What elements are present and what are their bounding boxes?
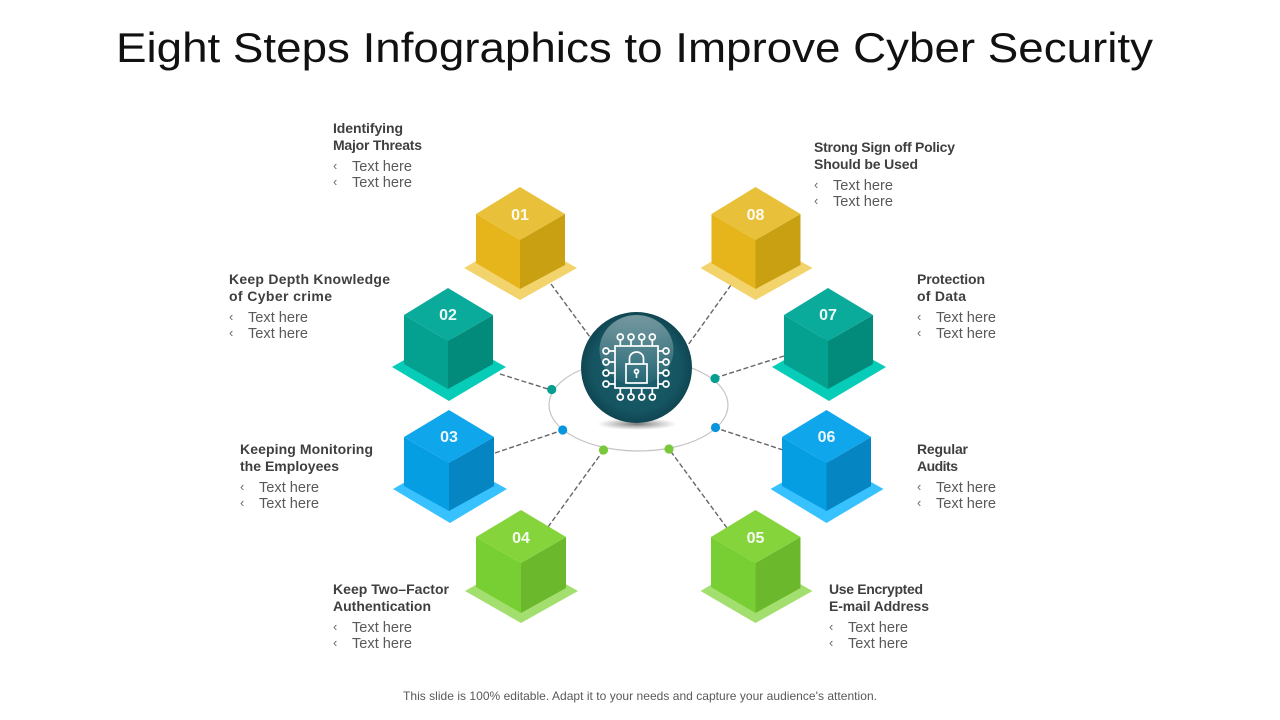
text block: step 01: ‹ xyxy=(333,174,337,189)
text block: step 07: Text here xyxy=(936,310,996,326)
text block: step 08 xyxy=(814,139,955,210)
center sphere with chip lock icon xyxy=(581,312,692,430)
text block: step 02: Text here xyxy=(248,310,308,326)
text block: step 07 xyxy=(917,271,996,342)
title: Eight Steps Infographics to Improve Cyber Security xyxy=(116,24,1153,71)
text block: step 04: ‹ xyxy=(333,619,337,634)
text block: step 05: Text here xyxy=(848,620,908,636)
text block: step 01: Major Threats xyxy=(333,137,422,153)
text block: step 03: the Employees xyxy=(240,458,339,474)
cube 05 xyxy=(700,510,812,623)
text block: step 06: ‹ xyxy=(917,495,921,510)
text block: step 03: ‹ xyxy=(240,479,244,494)
cube 04 xyxy=(465,510,578,623)
connector lines xyxy=(495,284,784,528)
text block: step 08: ‹ xyxy=(814,193,818,208)
cube 03 xyxy=(393,410,507,523)
cube 04: 04 xyxy=(512,530,530,547)
cube 02 xyxy=(392,288,506,401)
cube 05: 05 xyxy=(747,530,764,547)
text block: step 03: Text here xyxy=(259,496,319,512)
footer note: This slide is 100% editable. Adapt it to your needs and capture your audience's attention. xyxy=(403,689,877,703)
text block: step 01: Text here xyxy=(352,159,412,175)
cube 03: 03 xyxy=(440,429,458,446)
text block: step 06: ‹ xyxy=(917,479,921,494)
orbit ring xyxy=(549,359,728,451)
text block: step 07: Protection xyxy=(917,271,985,287)
cube 08: 08 xyxy=(747,207,764,224)
text block: step 03: Text here xyxy=(259,480,319,496)
text block: step 01: Identifying xyxy=(333,120,403,136)
text block: step 05: E-mail Address xyxy=(829,598,929,614)
cube 01 xyxy=(464,187,577,300)
text block: step 02: ‹ xyxy=(229,309,233,324)
text block: step 06: Text here xyxy=(936,480,996,496)
cube 07 xyxy=(772,288,886,401)
text block: step 05: ‹ xyxy=(829,635,833,650)
cube 02: 02 xyxy=(439,307,457,324)
text block: step 02: Keep Depth Knowledge xyxy=(229,271,390,287)
text block: step 07: of Data xyxy=(917,288,966,304)
text block: step 04: Authentication xyxy=(333,598,431,614)
orbit dots xyxy=(547,374,720,455)
text block: step 02 xyxy=(229,271,390,342)
text block: step 08: Text here xyxy=(833,194,893,210)
text block: step 05: Text here xyxy=(848,636,908,652)
text block: step 08: ‹ xyxy=(814,177,818,192)
text block: step 07: ‹ xyxy=(917,325,921,340)
text block: step 06 xyxy=(917,441,996,512)
text block: step 04: Text here xyxy=(352,636,412,652)
text block: step 06: Audits xyxy=(917,458,958,474)
text block: step 07: ‹ xyxy=(917,309,921,324)
text block: step 05: Use Encrypted xyxy=(829,581,923,597)
text block: step 08: Text here xyxy=(833,178,893,194)
text block: step 06: Regular xyxy=(917,441,969,457)
text block: step 01: Text here xyxy=(352,175,412,191)
text block: step 01 xyxy=(333,120,422,191)
text block: step 04: Keep Two–Factor xyxy=(333,581,450,597)
text block: step 02: Text here xyxy=(248,326,308,342)
text block: step 04 xyxy=(333,581,450,652)
text block: step 05 xyxy=(829,581,929,652)
text block: step 01: ‹ xyxy=(333,158,337,173)
text block: step 02: ‹ xyxy=(229,325,233,340)
text block: step 05: ‹ xyxy=(829,619,833,634)
cube 06 xyxy=(770,410,884,523)
text block: step 04: Text here xyxy=(352,620,412,636)
cube 06: 06 xyxy=(818,429,836,446)
text block: step 06: Text here xyxy=(936,496,996,512)
text block: step 03: Keeping Monitoring xyxy=(240,441,373,457)
text block: step 02: of Cyber crime xyxy=(229,288,332,304)
text block: step 08: Should be Used xyxy=(814,156,918,172)
text block: step 04: ‹ xyxy=(333,635,337,650)
icon: chip with padlock xyxy=(603,334,669,400)
text block: step 03 xyxy=(240,441,373,512)
text block: step 03: ‹ xyxy=(240,495,244,510)
cube 08 xyxy=(700,187,812,300)
cube 07: 07 xyxy=(819,307,837,324)
text block: step 08: Strong Sign off Policy xyxy=(814,139,955,155)
text block: step 07: Text here xyxy=(936,326,996,342)
cube 01: 01 xyxy=(511,207,529,224)
